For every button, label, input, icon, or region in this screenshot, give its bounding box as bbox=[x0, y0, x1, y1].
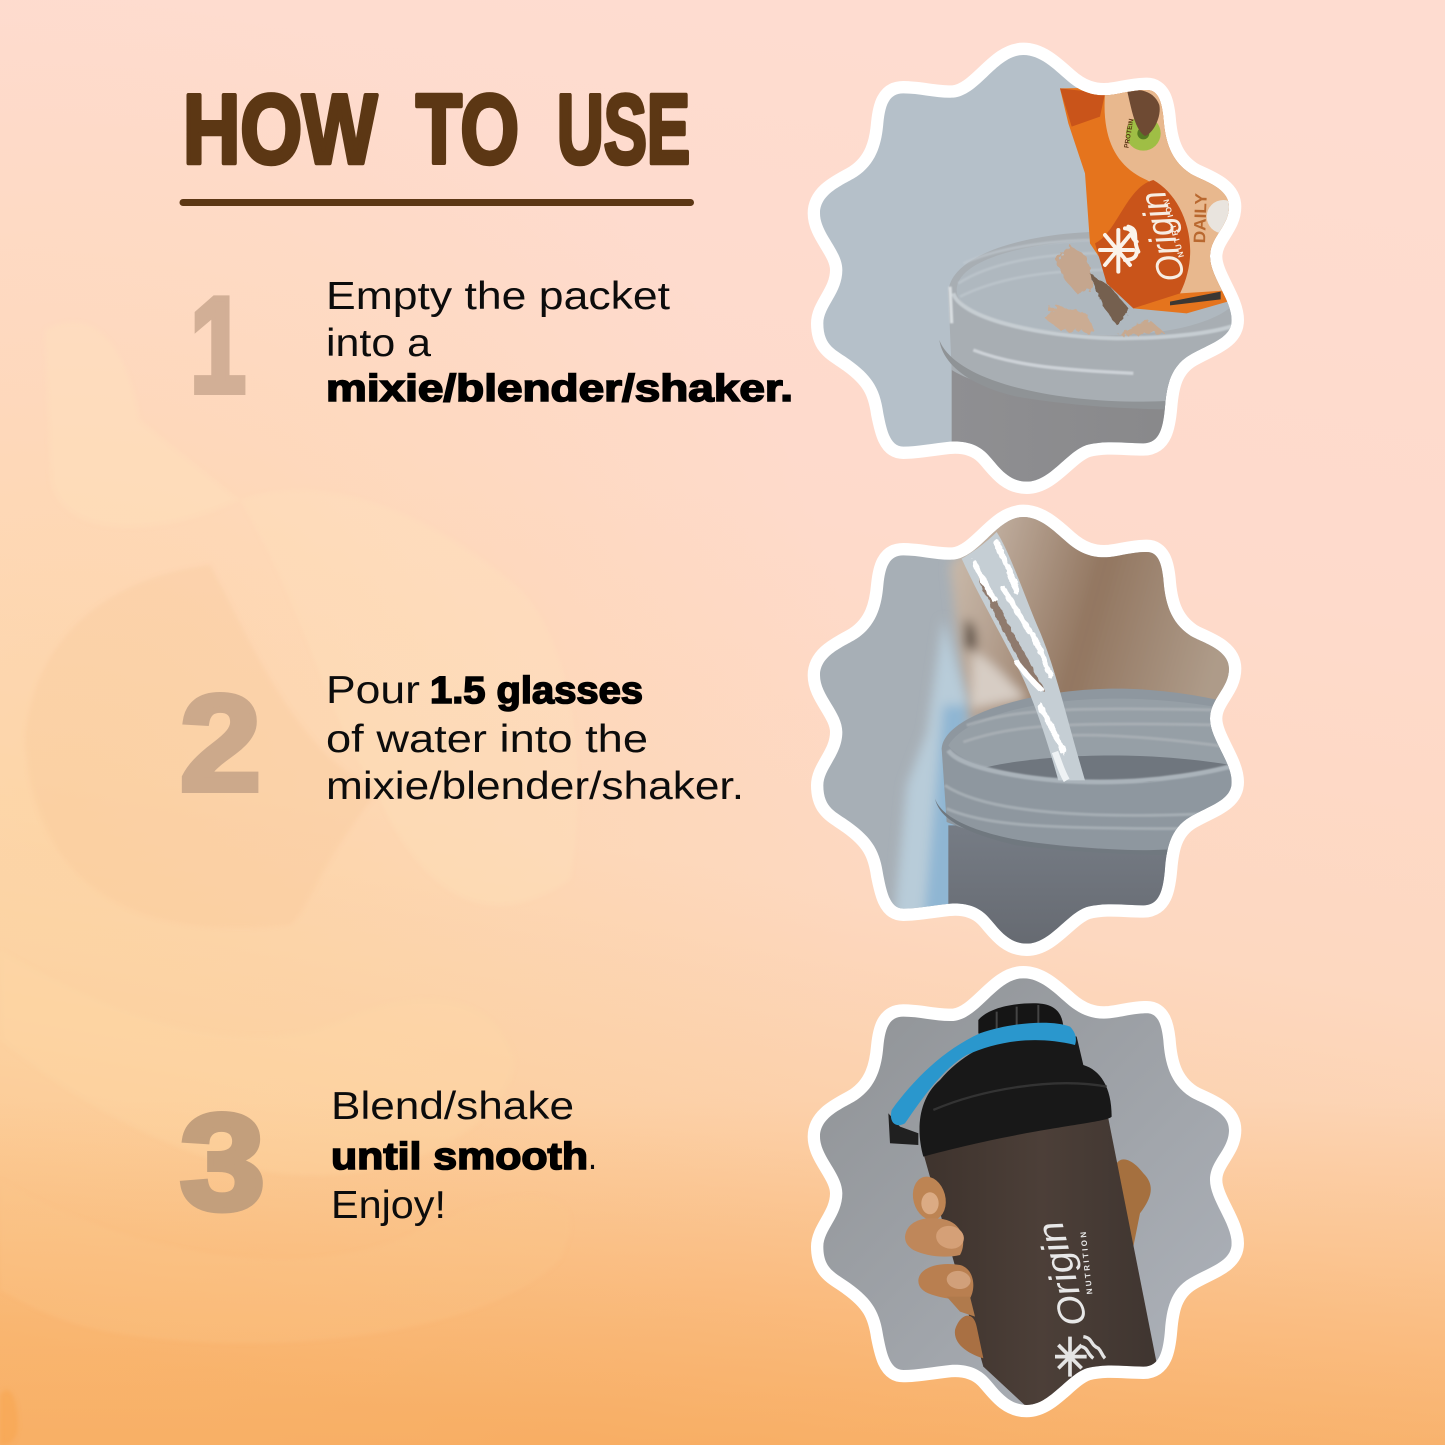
hand thumb bbox=[1117, 1159, 1151, 1246]
photo badge 1: packet emptied into jar bbox=[800, 30, 1260, 497]
step 2 text: mixie/blender/shaker. bbox=[326, 765, 744, 808]
number 2: 2 bbox=[180, 667, 261, 819]
hand fingers bbox=[905, 1173, 983, 1358]
title word: HOW: HOW bbox=[183, 74, 377, 184]
title bbox=[183, 74, 690, 184]
step 3 text bbox=[331, 1085, 597, 1227]
step 1 text: Empty the packet bbox=[326, 275, 670, 318]
step 2 text: 1.5 glasses bbox=[430, 670, 643, 712]
photo badge 3: hand holding shaker bottle bbox=[800, 953, 1260, 1420]
photo badge 2: water poured into jar bbox=[800, 492, 1260, 959]
title word: TO: TO bbox=[416, 74, 519, 184]
step 3 text: Blend/shake bbox=[331, 1085, 574, 1128]
water stream bbox=[962, 532, 1085, 780]
step 1 text bbox=[326, 275, 793, 410]
step 1 text: mixie/blender/shaker. bbox=[326, 368, 793, 410]
title word: USE: USE bbox=[557, 74, 690, 184]
number 1: 1 bbox=[190, 269, 246, 421]
step 2 text: of water into the bbox=[326, 718, 648, 761]
number 3: 3 bbox=[180, 1086, 265, 1238]
packet bbox=[1060, 87, 1240, 313]
blurred hand bbox=[948, 517, 1229, 718]
step 3 bbox=[180, 1085, 597, 1238]
jar bbox=[935, 689, 1240, 959]
bottle body bbox=[923, 1110, 1160, 1410]
bottle lid bbox=[888, 1003, 1112, 1157]
bottle logo: Origin bbox=[1029, 1217, 1095, 1331]
step 2 text: Pour bbox=[326, 669, 420, 712]
step 2 text bbox=[326, 669, 744, 808]
packet: PROTEIN bbox=[1123, 118, 1135, 149]
packet: Origin bbox=[1131, 187, 1193, 286]
step 1 text: into a bbox=[326, 322, 432, 365]
title underline bbox=[180, 199, 694, 206]
step 2 bbox=[180, 667, 744, 819]
packet: NUTRITION bbox=[1162, 198, 1186, 258]
blurred blue cloth bbox=[893, 619, 967, 925]
step 3 text: until smooth bbox=[331, 1136, 588, 1178]
packet: DAILY bbox=[1190, 193, 1211, 243]
jar bbox=[939, 232, 1240, 497]
step 3 text: . bbox=[588, 1135, 597, 1178]
step 3 text: Enjoy! bbox=[331, 1184, 446, 1227]
bottle logo: NUTRITION bbox=[1079, 1231, 1094, 1295]
powder chunks bbox=[1045, 245, 1163, 336]
packet logo bbox=[1100, 227, 1138, 272]
step 1 bbox=[190, 269, 793, 421]
bottle logo bbox=[1040, 1224, 1106, 1377]
